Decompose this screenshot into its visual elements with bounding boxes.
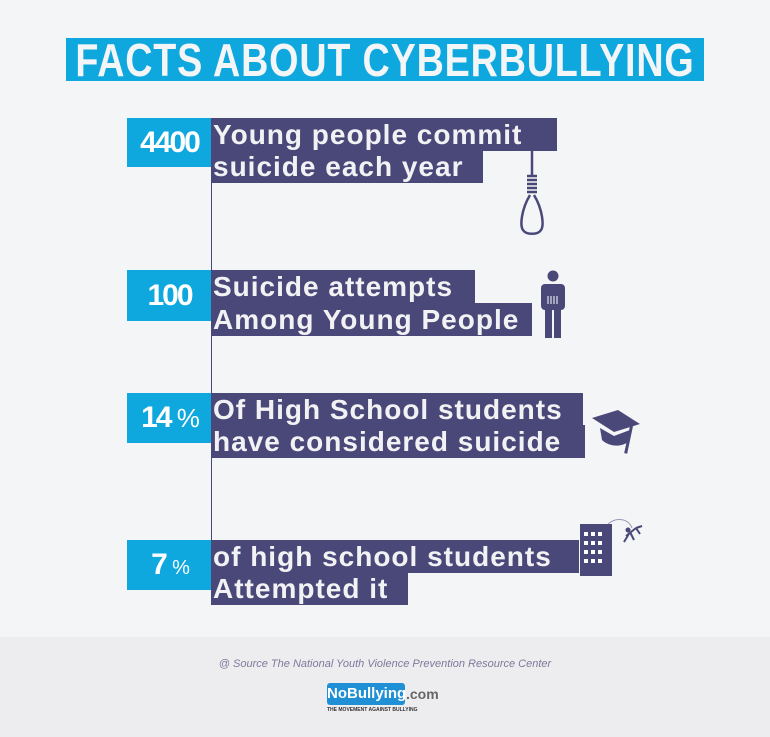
logo: .com <box>406 686 439 702</box>
icon: noose <box>520 151 544 235</box>
number 14% <box>127 393 212 443</box>
number 4400 <box>127 118 212 167</box>
text line 1: Young people commit <box>213 119 522 150</box>
text line 1: Suicide attempts <box>213 271 453 302</box>
text line 2: Attempted it <box>213 573 388 604</box>
logo: THE MOVEMENT AGAINST BULLYING <box>327 707 417 713</box>
number 7% <box>127 540 212 590</box>
text line 2: suicide each year <box>213 151 463 182</box>
number 100: 100 <box>147 279 192 312</box>
text line 1: of high school students <box>213 541 552 572</box>
fact 1 <box>127 118 557 183</box>
icon: graduation cap <box>592 410 640 454</box>
fact 2 <box>127 270 532 336</box>
icon: building with falling person <box>580 519 642 576</box>
text line 1: Of High School students <box>213 394 563 425</box>
logo <box>327 683 439 713</box>
number 4400: 4400 <box>140 126 199 159</box>
number 14%: 14 % <box>141 401 198 434</box>
timeline line <box>211 118 212 598</box>
text line 2: have considered suicide <box>213 426 561 457</box>
footer band <box>0 637 770 737</box>
source text: @ Source The National Youth Violence Prevention Resource Center <box>219 658 551 670</box>
number 100 <box>127 270 212 321</box>
fact 3 <box>127 393 585 458</box>
fact 4 <box>127 540 579 605</box>
number 7%: 7 % <box>151 548 188 581</box>
logo: NoBullying <box>327 685 406 702</box>
text line 2: Among Young People <box>213 304 519 335</box>
icon: person <box>541 270 565 338</box>
